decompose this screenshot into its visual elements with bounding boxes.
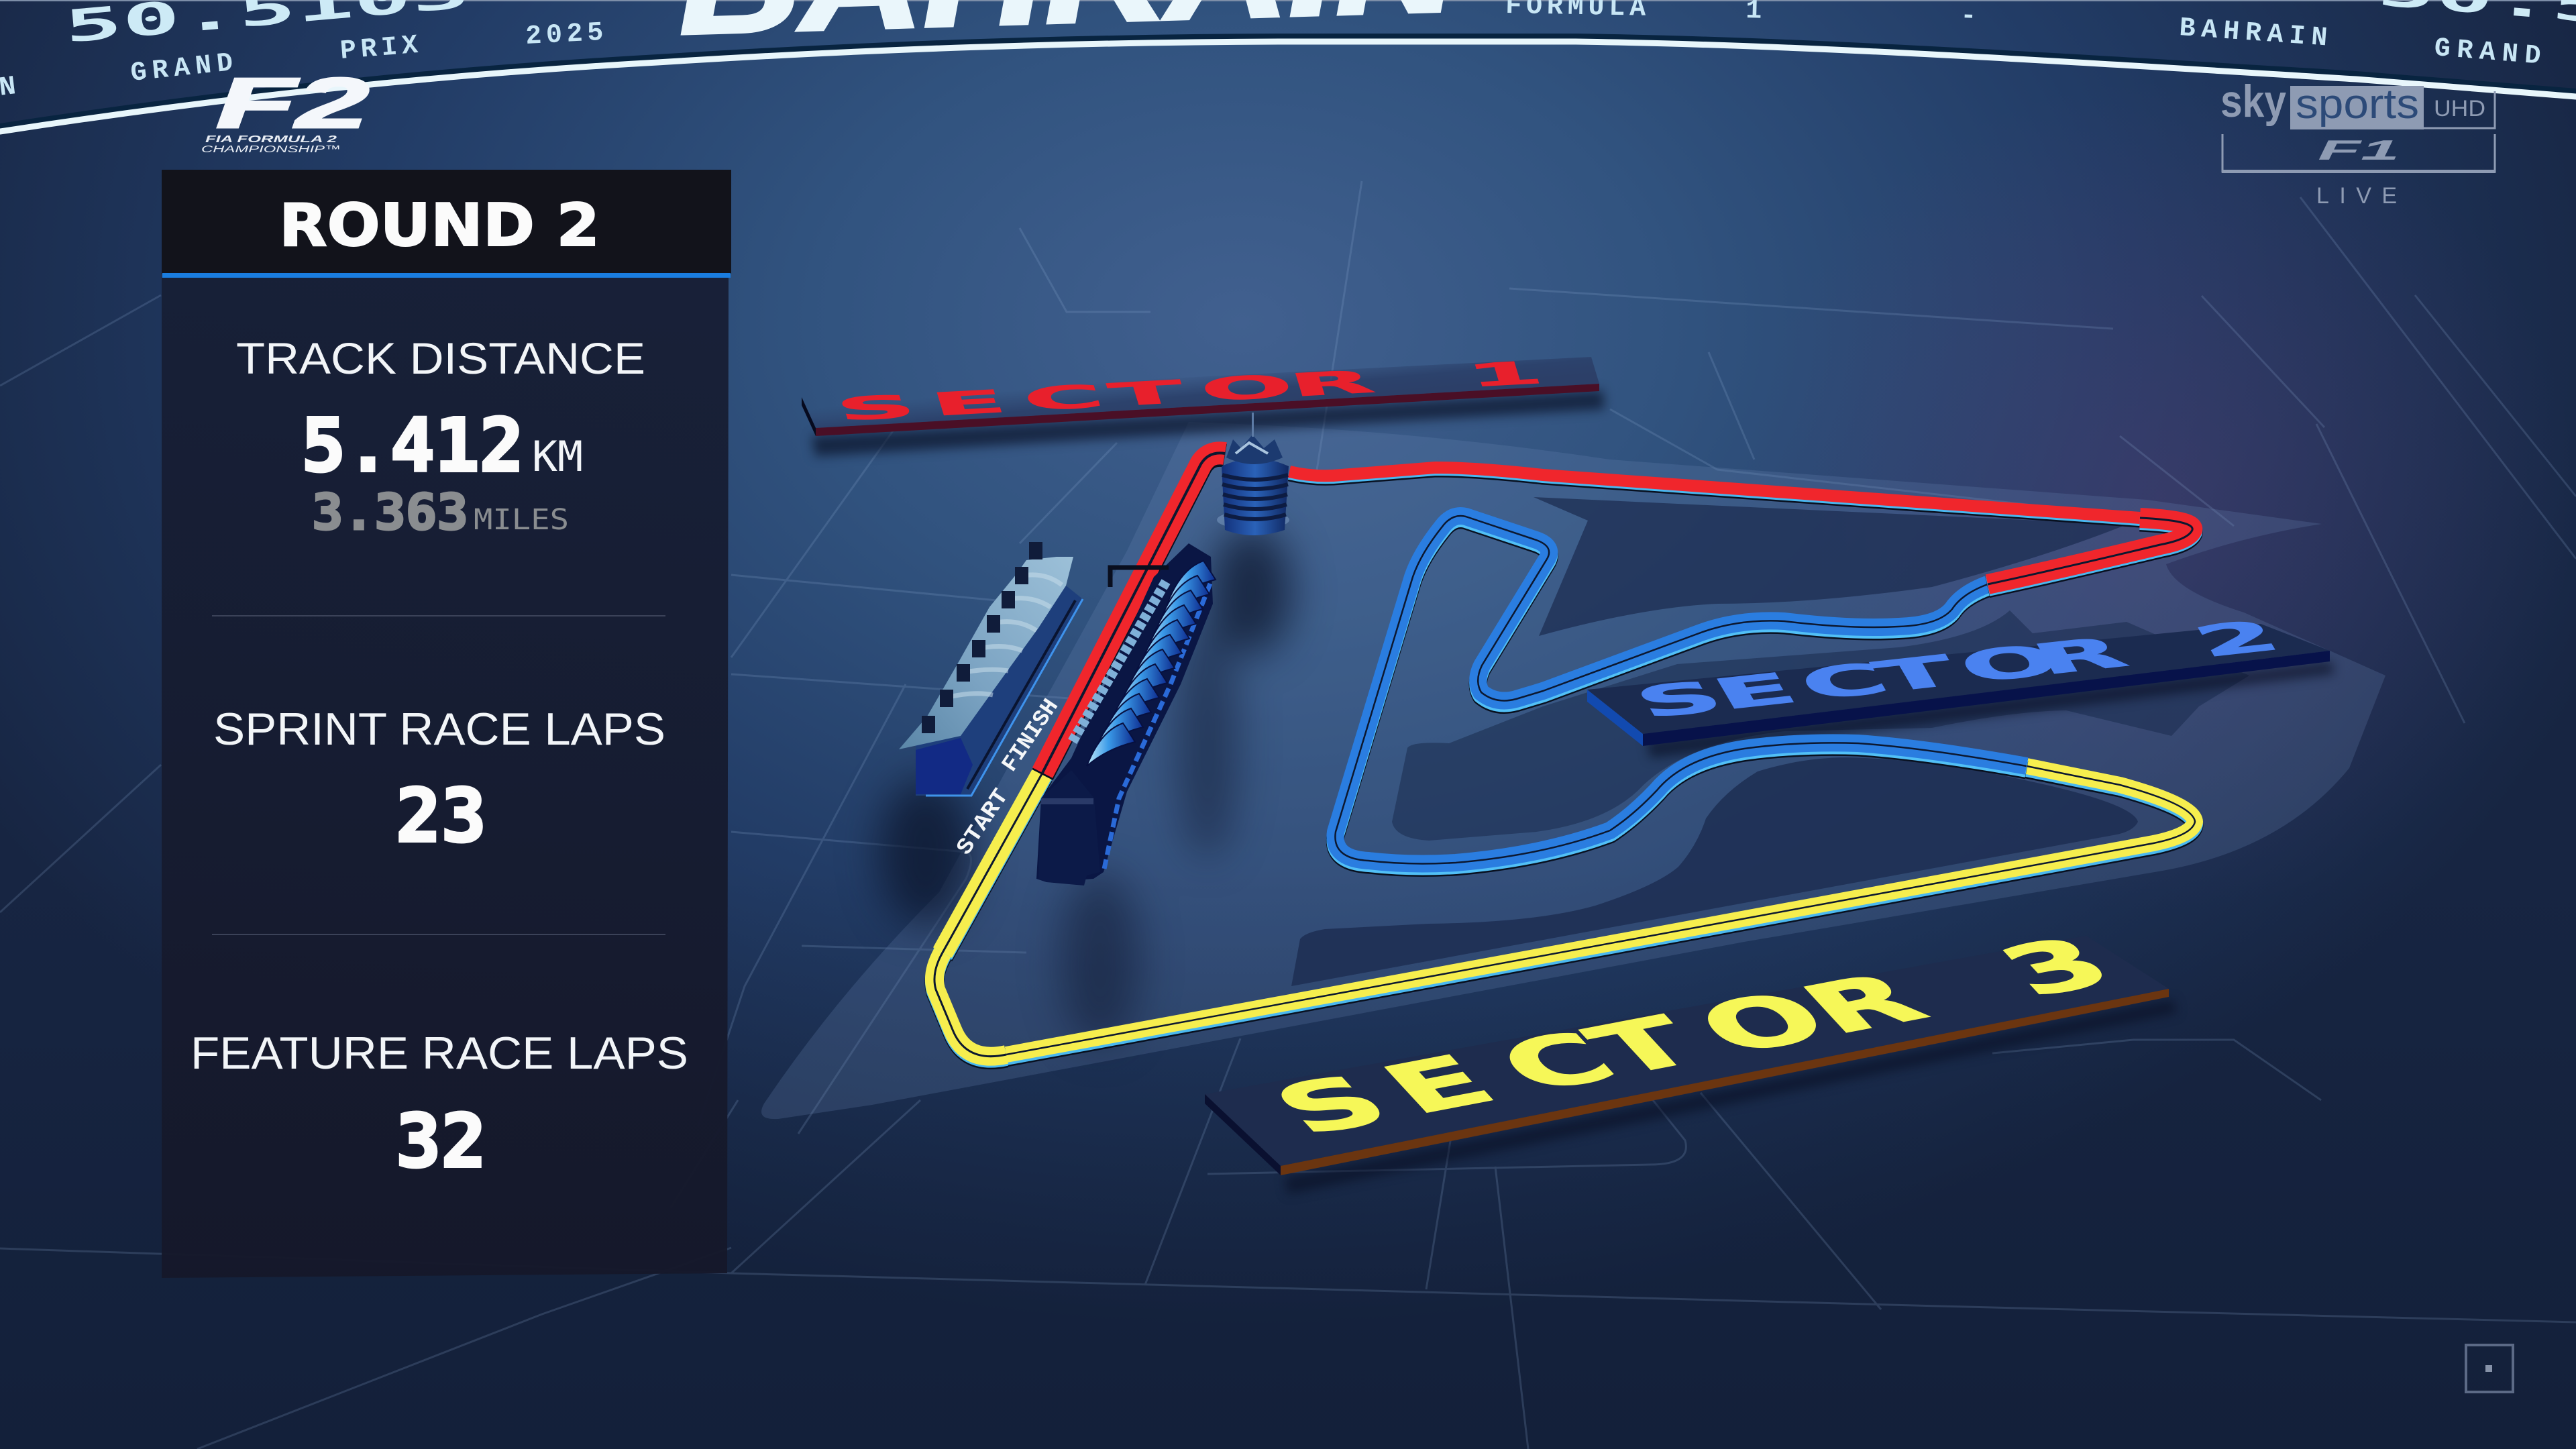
value: kilometres: KM xyxy=(532,432,583,481)
top banner: curved text band: GRAND xyxy=(2433,34,2542,72)
track sector 1 (red) xyxy=(1042,453,2192,775)
value: feature laps: 32 xyxy=(396,1098,486,1184)
heading: round 2: ROUND 2 xyxy=(279,191,600,260)
track sector 2 (blue) xyxy=(1335,516,2027,867)
panel body xyxy=(162,278,729,1278)
value: sprint laps: 23 xyxy=(396,773,486,859)
icon: corner square marker xyxy=(2466,1345,2513,1392)
F2 championship logo: FIA FORMULA 2 xyxy=(205,133,337,145)
sky sports UHD broadcaster logo: sports xyxy=(2296,81,2419,127)
label: start: START xyxy=(952,785,1015,860)
track sector 3 (yellow) xyxy=(934,766,2195,1060)
top banner: curved text band: - xyxy=(1960,1,1977,32)
gantry bridge xyxy=(1110,568,1169,587)
value: miles: 3.363 xyxy=(312,484,468,541)
curved white line xyxy=(0,37,2576,131)
label: feature race laps: FEATURE RACE LAPS xyxy=(191,1028,688,1079)
header accent line xyxy=(162,273,731,278)
panel: race stats xyxy=(162,170,731,1278)
sky sports UHD broadcaster logo: UHD xyxy=(2434,96,2485,121)
circuit runoff areas xyxy=(761,422,2385,1119)
sky sports UHD broadcaster logo xyxy=(2220,76,2496,209)
label: sprint race laps: SPRINT RACE LAPS xyxy=(213,704,665,755)
top banner: curved text band: GRAND xyxy=(129,48,235,89)
pit entrance block xyxy=(1038,770,1100,885)
top banner: curved text band: BAHRAIN xyxy=(2178,13,2328,54)
sector 1 sign: SECTOR 1 xyxy=(832,354,1548,428)
F2 championship logo: CHAMPIONSHIP™ xyxy=(201,144,341,155)
value: miles xyxy=(312,484,569,541)
value: kilometres: 5.412 xyxy=(301,402,524,488)
pit building xyxy=(1036,543,1216,885)
sky sports UHD broadcaster logo: LIVE xyxy=(2316,183,2397,209)
sector 1 sign xyxy=(802,354,1605,456)
value: miles: MILES xyxy=(474,503,569,537)
panel header xyxy=(162,170,731,274)
sky sports UHD broadcaster logo: F1 xyxy=(2318,134,2400,166)
top banner: curved text band xyxy=(0,0,2576,131)
F2 championship logo xyxy=(201,64,369,155)
sky sports UHD broadcaster logo: sky xyxy=(2220,76,2286,127)
top banner: curved text band: 2025 xyxy=(525,18,604,52)
F2 championship logo: F2 xyxy=(216,64,369,143)
top banner: curved text band: PRIX xyxy=(339,31,419,67)
building shadows xyxy=(879,527,1291,1046)
grandstand xyxy=(899,542,1083,796)
label: track distance: TRACK DISTANCE xyxy=(236,333,645,383)
sector 3 sign: SECTOR 3 xyxy=(1254,923,2133,1150)
thin top edge line xyxy=(0,0,2576,1)
label: finish: FINISH xyxy=(998,695,1065,777)
control tower xyxy=(1217,413,1289,535)
sector 2 sign: SECTOR 2 xyxy=(1626,611,2290,728)
